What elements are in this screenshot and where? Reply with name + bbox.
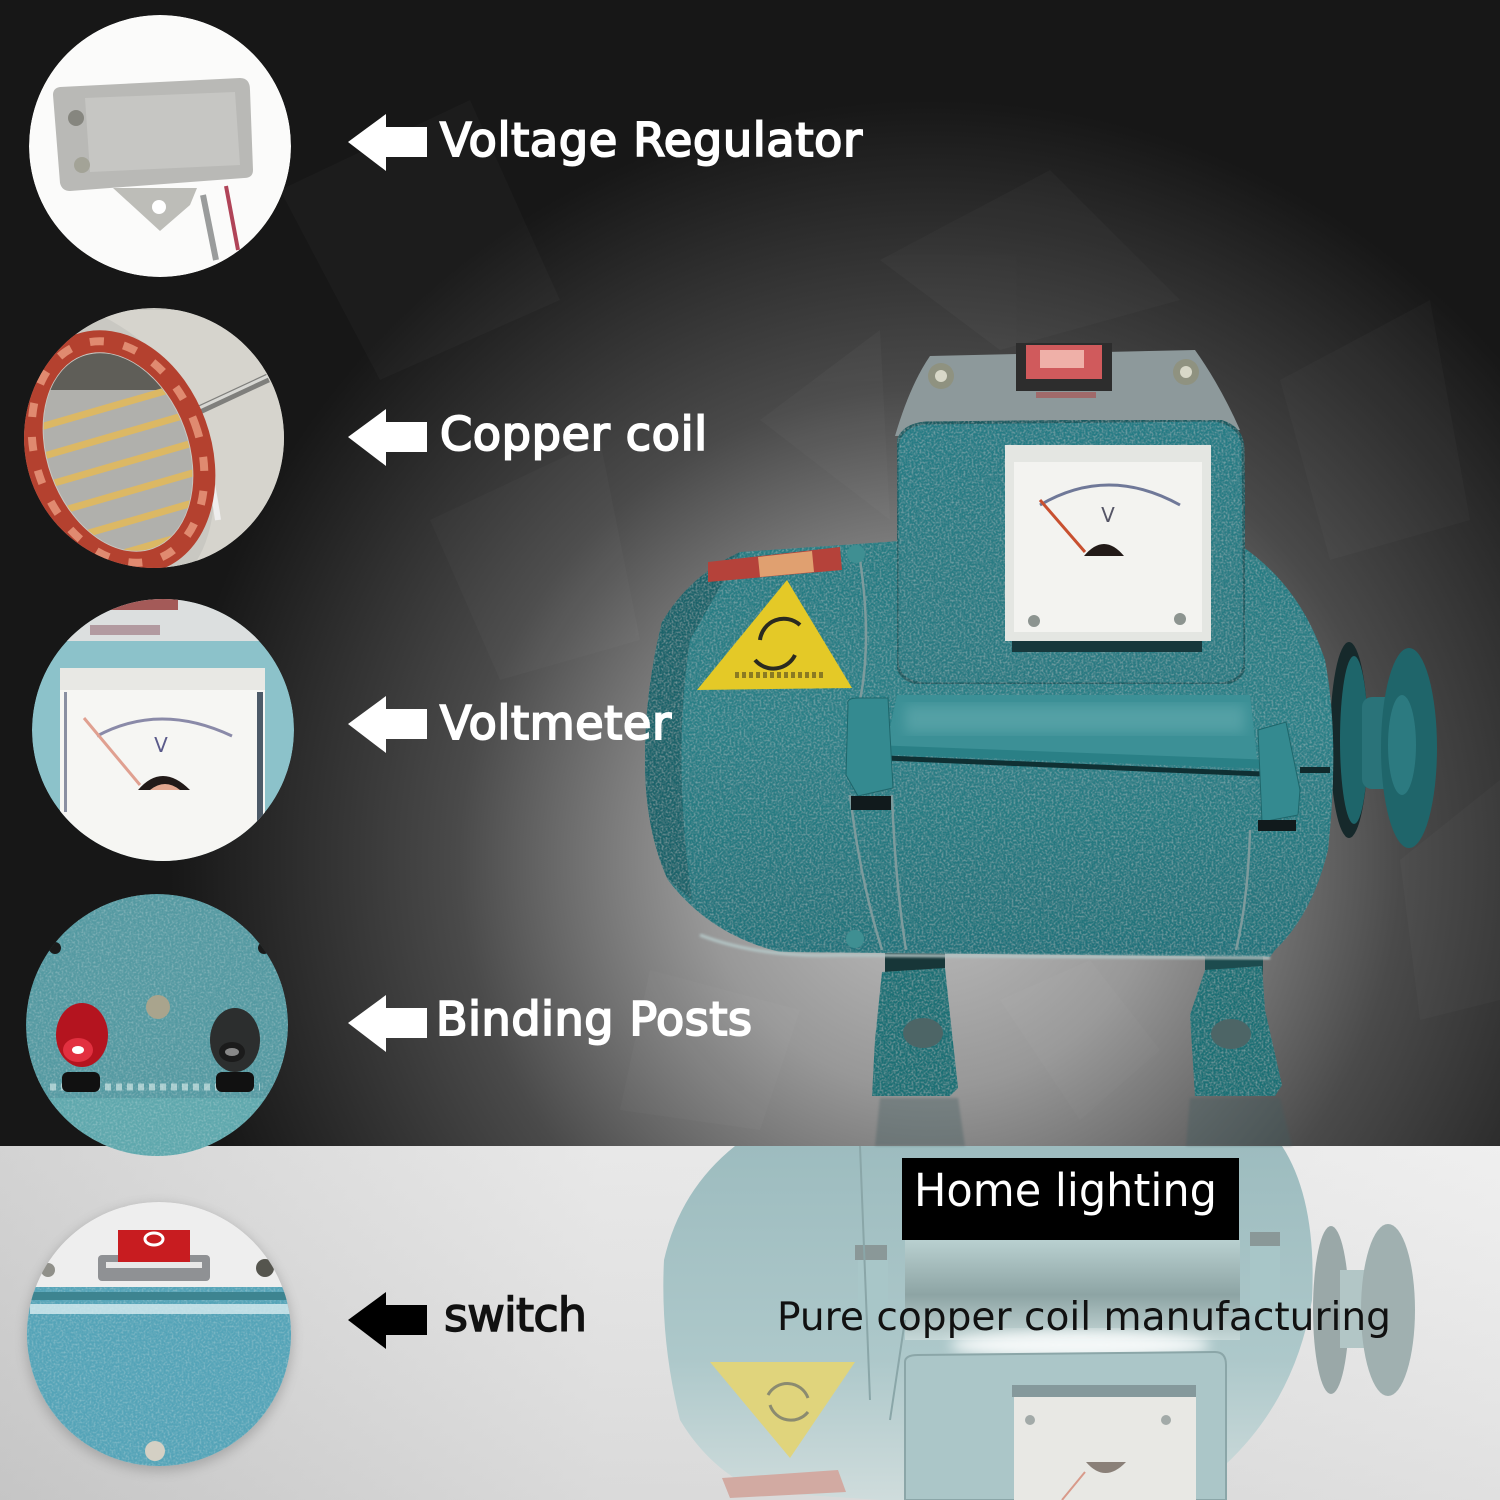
motor feet reflection xyxy=(875,1098,1292,1146)
reflected pulley xyxy=(1313,1224,1415,1396)
circle: copper coil xyxy=(24,308,284,568)
warning sticker xyxy=(697,580,852,690)
label: voltmeter: Voltmeter xyxy=(440,696,671,750)
reflection of motor xyxy=(663,1146,1415,1500)
main body xyxy=(645,541,1333,957)
caption: Pure copper coil manufacturing xyxy=(777,1295,1391,1340)
circle: voltmeter xyxy=(30,596,300,873)
reflected meter xyxy=(1012,1385,1196,1500)
reflected sticker xyxy=(710,1362,855,1498)
label: copper coil: Copper coil xyxy=(440,407,707,461)
label: voltmeter xyxy=(348,696,671,753)
reflection glow xyxy=(950,1331,1210,1359)
circle: voltage regulator xyxy=(29,15,291,277)
label: switch: switch xyxy=(444,1288,587,1342)
band highlight xyxy=(885,695,1258,768)
circle: voltmeter: V xyxy=(154,733,168,757)
meter housing xyxy=(897,420,1245,684)
reflected clamps xyxy=(855,1146,1280,1420)
voltmeter xyxy=(1005,445,1211,652)
home lighting label xyxy=(902,1158,1239,1240)
terminal screws xyxy=(928,359,1199,389)
pulley xyxy=(1330,642,1437,848)
voltmeter: V xyxy=(1101,503,1115,527)
reflected body xyxy=(663,1146,1313,1500)
mounting feet xyxy=(872,945,1282,1096)
floor xyxy=(0,1146,1500,1500)
motor xyxy=(645,343,1437,1096)
circle: binding posts xyxy=(26,894,288,1156)
label: binding posts: Binding Posts xyxy=(436,992,752,1046)
circle: switch xyxy=(20,1202,300,1477)
label: switch xyxy=(348,1288,587,1349)
red label xyxy=(708,545,865,948)
reflected band xyxy=(905,1240,1240,1340)
label: voltage regulator: Voltage Regulator xyxy=(440,113,862,167)
cooling band xyxy=(846,698,1330,831)
home lighting label: Home lighting xyxy=(914,1164,1217,1217)
top plate xyxy=(895,350,1240,436)
label: copper coil xyxy=(348,407,707,466)
power switch xyxy=(1016,343,1112,398)
background xyxy=(0,0,1500,1146)
reflected meter housing xyxy=(905,1352,1226,1500)
